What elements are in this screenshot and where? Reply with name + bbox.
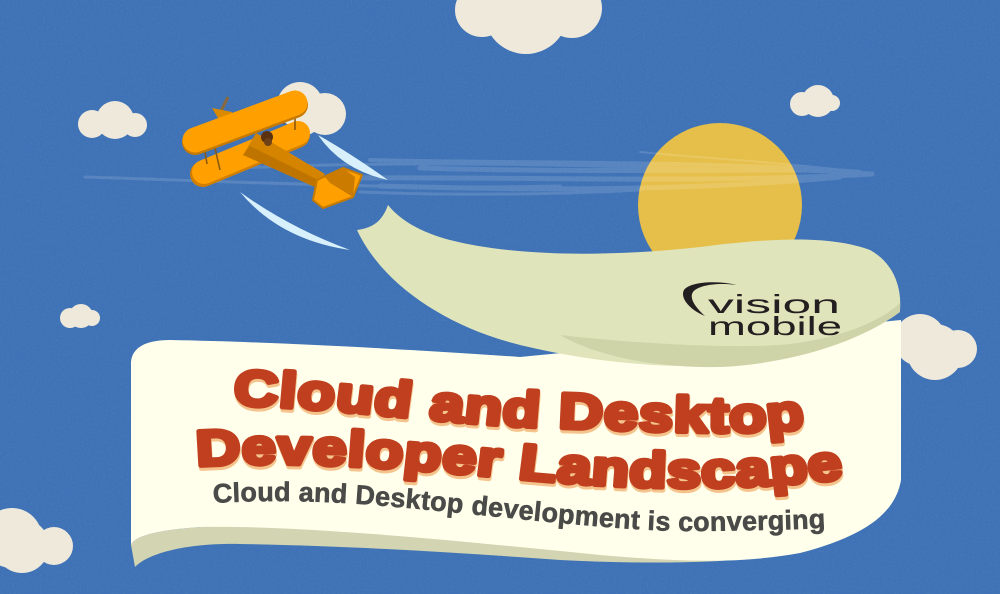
lower wing — [203, 133, 298, 174]
logo swoosh — [683, 282, 737, 316]
propeller — [212, 97, 236, 122]
subtitle: Cloud and Desktop development is converging — [214, 481, 824, 536]
logo: vision mobile — [683, 282, 842, 341]
banner face — [131, 320, 901, 561]
cloud: small lower left — [60, 304, 100, 328]
pennant shaded fold — [560, 303, 900, 367]
title: Cloud and Desktop Developer Landscape — [196, 368, 844, 500]
cloud: behind plane — [277, 82, 346, 135]
pilot — [261, 131, 273, 146]
cloud: bottom left — [0, 508, 73, 573]
title shadow: Cloud and Desktop — [234, 373, 804, 447]
cream banner — [131, 320, 901, 567]
struts — [205, 110, 295, 170]
title lettering: Cloud and Desktop — [234, 368, 804, 444]
title lettering: Developer Landscape — [196, 428, 843, 498]
title shadow: Developer Landscape — [198, 432, 844, 500]
biplane — [195, 97, 362, 208]
logo word: mobile: mobile — [708, 311, 842, 341]
green pennant — [357, 205, 900, 367]
cloud: upper right — [790, 85, 840, 117]
title shadow — [198, 373, 844, 500]
title lettering — [196, 368, 843, 498]
logo word: vision: vision — [708, 289, 840, 319]
upper wing — [195, 103, 295, 142]
cloud: left — [78, 101, 147, 139]
sky streaks — [85, 152, 872, 194]
tail — [313, 168, 362, 208]
speed line: upper — [318, 135, 388, 180]
sun — [638, 123, 802, 287]
banner underside fold — [131, 526, 780, 567]
cloud: right of banner — [894, 314, 977, 380]
pennant face — [357, 205, 900, 366]
cloud: top centre — [455, 0, 602, 54]
speed line: lower — [240, 192, 350, 250]
fuselage — [243, 133, 325, 187]
